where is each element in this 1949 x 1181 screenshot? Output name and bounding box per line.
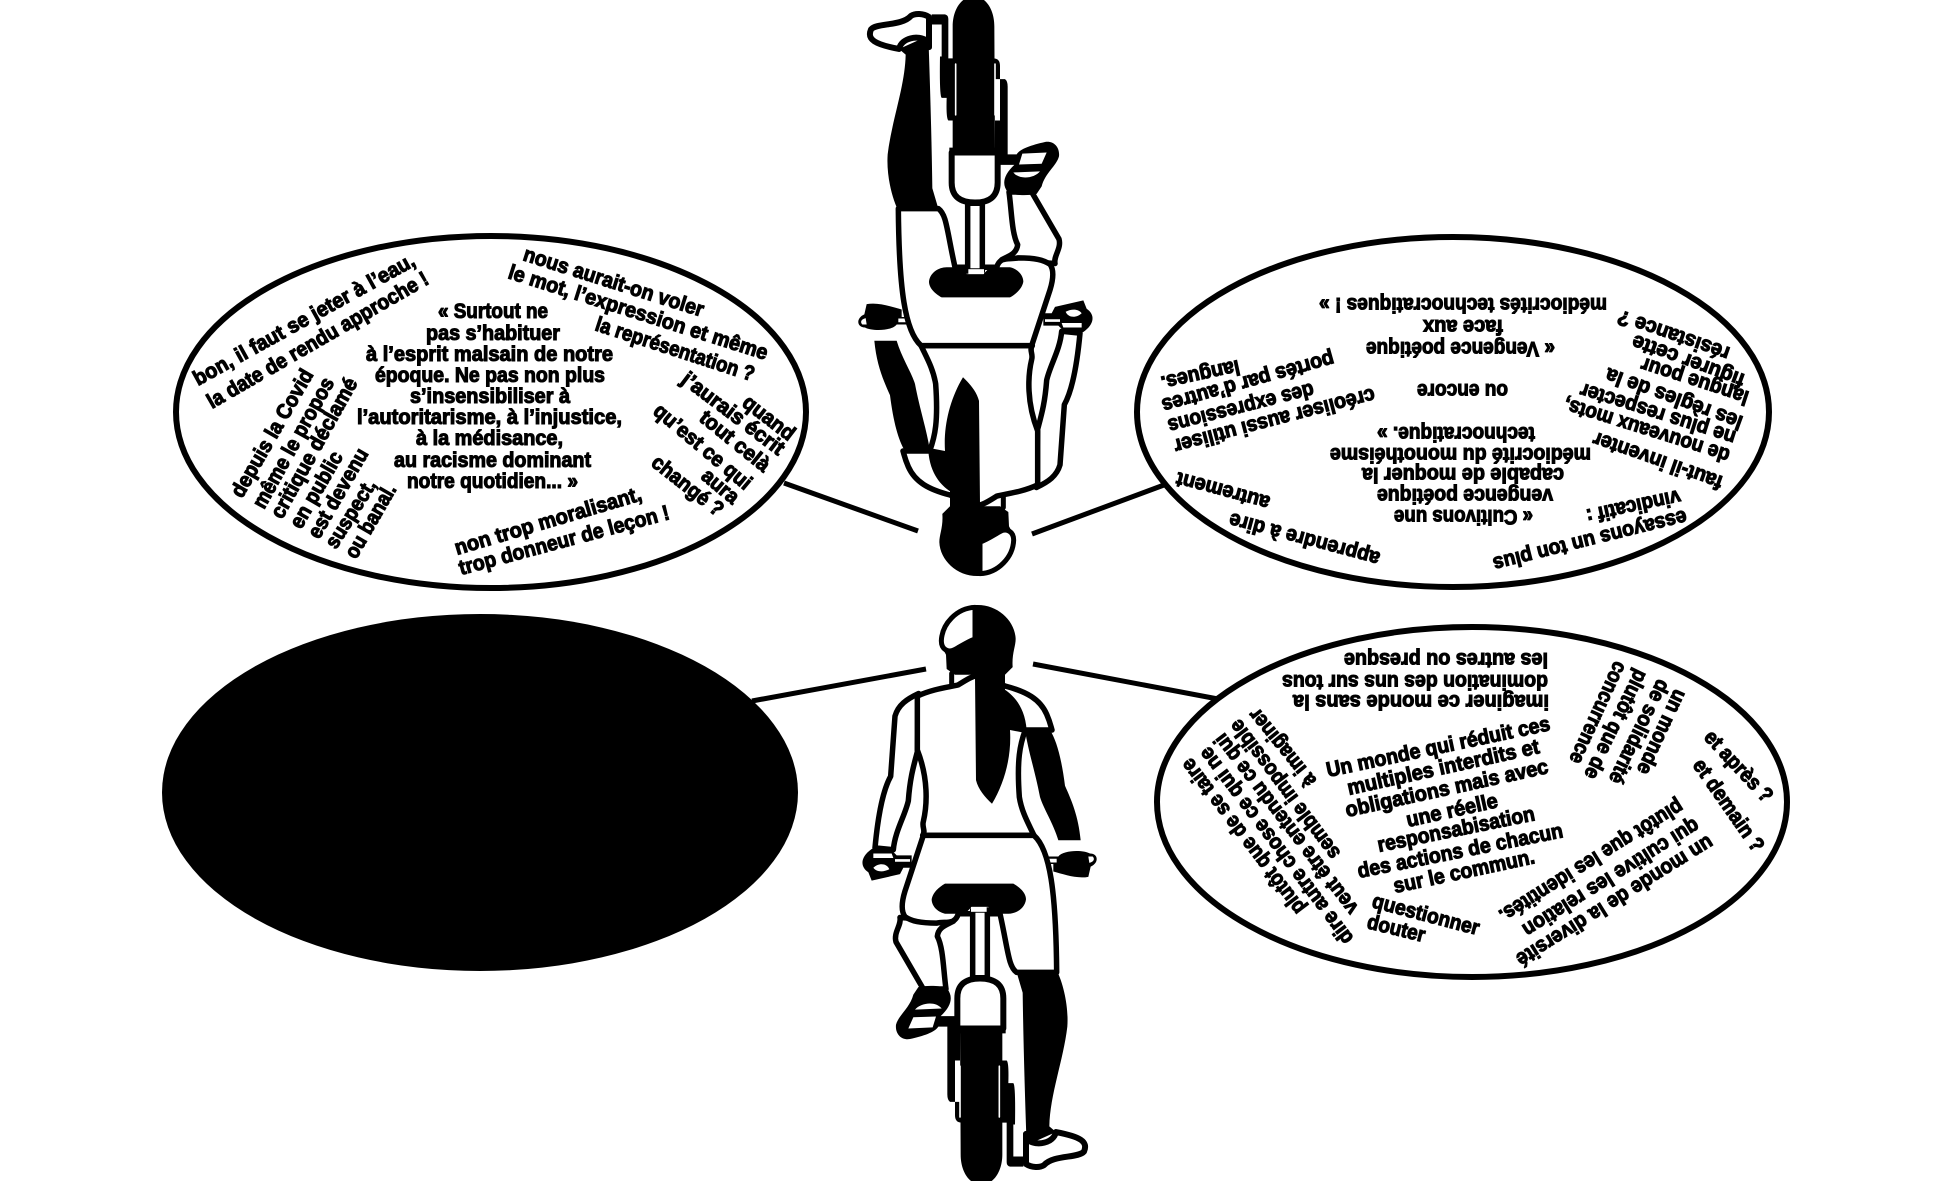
note: essayons un ton plus: vindicatif : [1584,485,1683,528]
note: un monde de solidarité: de solidarité [1604,676,1674,787]
note: apprendre à dire [1174,467,1382,570]
note: nous aurait-on voler: le mot, l’expression et même [505,261,771,365]
central quote: au racisme dominant [394,449,591,472]
note: imaginer ce monde: imaginer ce monde sans la [1293,690,1549,713]
central text: un monde qui réduit: responsabisation [1375,802,1537,857]
note: bon, il faut: la date de rendu approche ! [203,267,433,413]
quote: vengence poétique: face aux [1423,315,1503,338]
mudguard [957,978,1003,1029]
note: un monde de la diversité: un monde de la diversité [1512,831,1718,971]
note: non trop moralisant: trop donneur de leçon ! [456,501,672,580]
note: imaginer ce monde [1282,648,1549,713]
speech bubble: bottom left, solid black [162,614,798,971]
note: un monde de solidarité [1564,658,1691,787]
rear rack and crank [947,1017,1023,1167]
central quote: époque. Ne pas non plus [375,364,605,387]
quote: cultivons: médiocrité du monothéisme [1330,443,1591,466]
note: quand j'aurais écrit: changé ? [647,451,728,521]
quote: vengence poétique: « Vengence poétique [1366,337,1555,360]
note: faut-il inventer: de nouveaux mots, [1561,393,1733,467]
note: faut-il inventer [1561,305,1752,494]
quote: cultivons: vengence poétique [1377,484,1553,507]
ou encore: ou encore [1417,379,1508,402]
connector: bottom left bubble [752,669,926,701]
note: depuis la Covid: même le propos [248,374,339,512]
note: quand j'aurais écrit: tout celà [695,406,775,477]
central text: un monde qui réduit: multiples interdits et [1345,735,1542,800]
right arm, black [1025,730,1081,840]
quote: cultivons: capable de moquer la [1362,463,1564,486]
note: un monde de solidarité: plutôt que de [1579,666,1652,783]
note: plutôt que de se taire: semble impossible [1225,715,1345,864]
note: questionner douter: douter [1365,911,1428,947]
note: depuis la Covid: en public [285,447,348,532]
text: top right bubble [1159,293,1752,576]
note: faut-il inventer: figurer cette [1629,330,1748,392]
note: créoliser [1159,347,1378,458]
note: un monde de la diversité: qui cultive les relation [1518,814,1704,941]
note: quand j'aurais écrit [647,367,800,521]
note: faut-il inventer: langue pour [1638,353,1752,409]
quote: cultivons: « Cultivons une [1394,505,1533,528]
shorts [902,835,1057,972]
note: et après, et demain: et demain ? [1688,755,1769,856]
central text: un monde qui réduit: Un monde qui réduit ces [1324,712,1552,782]
note: depuis la Covid: depuis la Covid [226,365,318,502]
left shoe and pedal [896,986,955,1039]
note: essayons un ton plus: essayons un ton plus [1491,505,1689,576]
central quote: pas s’habituer [426,322,560,345]
note: depuis la Covid: ou banal. [340,480,401,562]
note: depuis la Covid: est devenu [303,444,373,542]
note: bon, il faut: bon, il faut se jeter à l’eau, [189,249,419,390]
central text: un monde qui réduit: une réelle [1404,789,1500,832]
quote: vengence poétique [1319,293,1607,360]
cyclist seen from behind, bottom [862,605,1097,1181]
left leg [895,917,953,989]
saddle [932,884,1026,914]
text: bottom right bubble [1177,648,1778,971]
speech bubble: bottom right [1157,627,1787,977]
note: quand j'aurais écrit: aura [697,464,744,509]
note: plutôt que de se taire: à imaginer [1244,704,1321,791]
note: imaginer ce monde: les autres ou presque [1344,648,1548,671]
helmet and head [943,605,1016,690]
note: nous aurait-on voler: la représentation ? [592,313,757,386]
note: faut-il inventer: les règles de la [1602,363,1746,434]
note: imaginer ce monde: domination des uns sur tous [1282,670,1548,693]
note: plutôt que de se taire: veut être entendu ce qui [1210,729,1363,919]
seat post [973,910,987,978]
handlebar right hand [1048,851,1097,877]
neck line [949,674,954,684]
central quote: l’autoritarisme, à l’injustice, [357,406,622,429]
central quote [357,300,622,493]
central quote: à la médisance, [416,427,563,450]
connector: bottom right bubble [1033,664,1218,699]
right shoe [1026,1132,1085,1167]
quote: cultivons: technocratique. » [1377,422,1535,445]
quote: vengence poétique: médiocrités technocratiques ! » [1319,293,1607,316]
note: un monde de solidarité: concurrence [1564,658,1631,767]
note: créoliser: des expressions [1165,378,1316,437]
text: top left bubble [189,243,800,580]
note: créoliser: portés par d’autres [1159,347,1337,417]
central quote: notre quotidien... » [407,470,578,493]
note: questionner douter: questionner [1370,890,1482,940]
note: et après, et demain: et après ? [1699,726,1778,807]
rear wheel [960,1027,1002,1181]
note: apprendre à dire: apprendre à dire [1227,508,1382,570]
connector: top right bubble [1032,485,1164,534]
central text: un monde qui réduit: des actions de chacun [1355,819,1565,883]
note: quand j'aurais écrit: quand [738,391,800,446]
note: faut-il inventer: ne plus respecter [1577,378,1739,449]
note: plutôt que de se taire: plutôt que de se taire [1177,754,1310,919]
cyclist upside down, top [858,0,1093,576]
speech bubble: top left [176,236,806,588]
quote: cultivons [1330,422,1591,528]
connector: top left bubble [784,483,918,531]
note: créoliser: créoliser aussi utiliser [1171,383,1378,458]
handlebar left hand [862,848,912,881]
note: quand j'aurais écrit: qu’est ce qui [649,399,756,495]
central text: un monde qui réduit: obligations mais avec [1343,755,1551,822]
central quote: s’insensibiliser à [410,385,570,408]
note: faut-il inventer: faut-il inventer [1590,427,1726,494]
note: depuis la Covid [226,365,401,562]
note: un monde de solidarité: un monde [1632,686,1691,778]
note: nous aurait-on voler: nous aurait-on voler [520,243,707,322]
right leg, black [1016,970,1068,1145]
ponytail [975,677,1027,804]
note: depuis la Covid: critique déclamé [266,374,362,522]
note: créoliser: langues. [1159,355,1242,395]
note: depuis la Covid: suspect, [321,475,381,553]
note: quand j'aurais écrit: j’aurais écrit [676,367,789,460]
note: plutôt que de se taire: dire autre chose ce qui ne [1195,743,1358,949]
central quote: à l’esprit malsain de notre [366,343,613,366]
note: apprendre à dire: autrement [1174,467,1272,514]
note: un monde de la diversité: plutôt que les identités. [1495,795,1688,927]
central text: un monde qui réduit: sur le commun. [1391,845,1537,898]
speech bubble: top right [1137,237,1769,587]
left arm [875,694,919,850]
central text: un monde qui réduit [1324,712,1565,898]
torso [917,676,1052,835]
note: faut-il inventer: résistance ? [1615,305,1733,365]
note: non trop moralisant: non trop moralisant, [452,483,644,560]
central quote: « Surtout ne [438,300,548,323]
